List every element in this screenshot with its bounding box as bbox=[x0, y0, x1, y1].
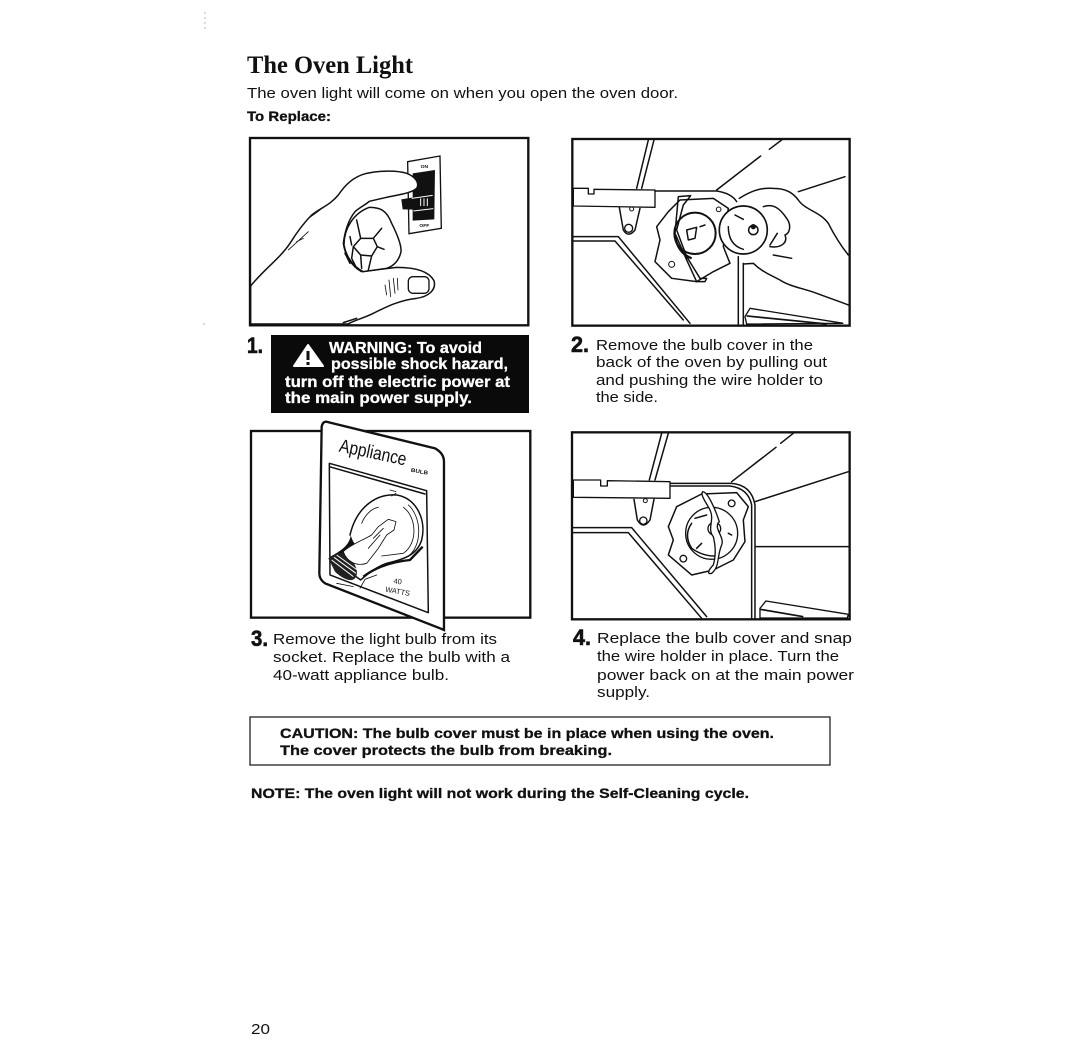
step 3 text bbox=[273, 631, 511, 684]
step number 1: 1. bbox=[247, 333, 263, 358]
step 2 text bbox=[596, 337, 828, 406]
warning text: WARNING: To avoid bbox=[329, 340, 482, 357]
step number 4: 4. bbox=[573, 625, 591, 650]
icon: warning triangle bbox=[294, 345, 323, 366]
panel: step 4 bulb cover in place bbox=[572, 432, 850, 619]
panel: step 1 hand turning off switch: ON bbox=[421, 164, 428, 170]
warning text: turn off the electric power at bbox=[285, 374, 510, 391]
step 2 text: the side. bbox=[596, 389, 658, 406]
page number: 20 bbox=[251, 1021, 270, 1038]
step 4 text: supply. bbox=[597, 684, 650, 701]
step 2 text: back of the oven by pulling out bbox=[596, 354, 828, 371]
warning text: possible shock hazard, bbox=[331, 356, 508, 373]
panel: step 3 appliance bulb package bbox=[251, 422, 530, 630]
caution box bbox=[250, 717, 830, 765]
panel: step 2 removing bulb cover bbox=[572, 139, 850, 326]
title: The Oven Light bbox=[247, 52, 414, 79]
step number 2: 2. bbox=[571, 332, 589, 357]
step 3 text: Remove the light bulb from its bbox=[273, 631, 497, 648]
step 2 text: and pushing the wire holder to bbox=[596, 372, 823, 389]
panel: step 1 hand turning off switch bbox=[250, 138, 528, 325]
note: NOTE: The oven light will not work during the Self-Cleaning cycle. bbox=[251, 785, 749, 801]
subheading: to replace: To Replace: bbox=[247, 108, 331, 124]
panel: step 3 appliance bulb package: 40 bbox=[393, 576, 402, 586]
panel: step 3 appliance bulb package: WATTS bbox=[385, 585, 411, 598]
step 3 text: socket. Replace the bulb with a bbox=[273, 649, 511, 666]
step 4 text bbox=[597, 630, 854, 701]
step 4 text: power back on at the main power bbox=[597, 667, 854, 684]
caution box: CAUTION: The bulb cover must be in place when using the oven. bbox=[280, 725, 774, 741]
step 4 text: Replace the bulb cover and snap bbox=[597, 630, 852, 647]
step number 3: 3. bbox=[251, 626, 268, 651]
intro text: The oven light will come on when you open the oven door. bbox=[247, 85, 678, 102]
step 3 text: 40-watt appliance bulb. bbox=[273, 667, 449, 684]
warning text bbox=[285, 340, 510, 407]
panel: step 1 hand turning off switch: OFF bbox=[419, 223, 429, 229]
panel: step 3 appliance bulb package: Appliance bbox=[337, 435, 409, 469]
panel: step 3 appliance bulb package: BULB bbox=[410, 468, 429, 477]
warning text: the main power supply. bbox=[285, 390, 472, 407]
step 2 text: Remove the bulb cover in the bbox=[596, 337, 813, 354]
step 4 text: the wire holder in place. Turn the bbox=[597, 648, 839, 665]
crop marks bbox=[204, 12, 205, 327]
caution box: The cover protects the bulb from breaking. bbox=[280, 742, 612, 758]
warning box bbox=[271, 335, 529, 413]
